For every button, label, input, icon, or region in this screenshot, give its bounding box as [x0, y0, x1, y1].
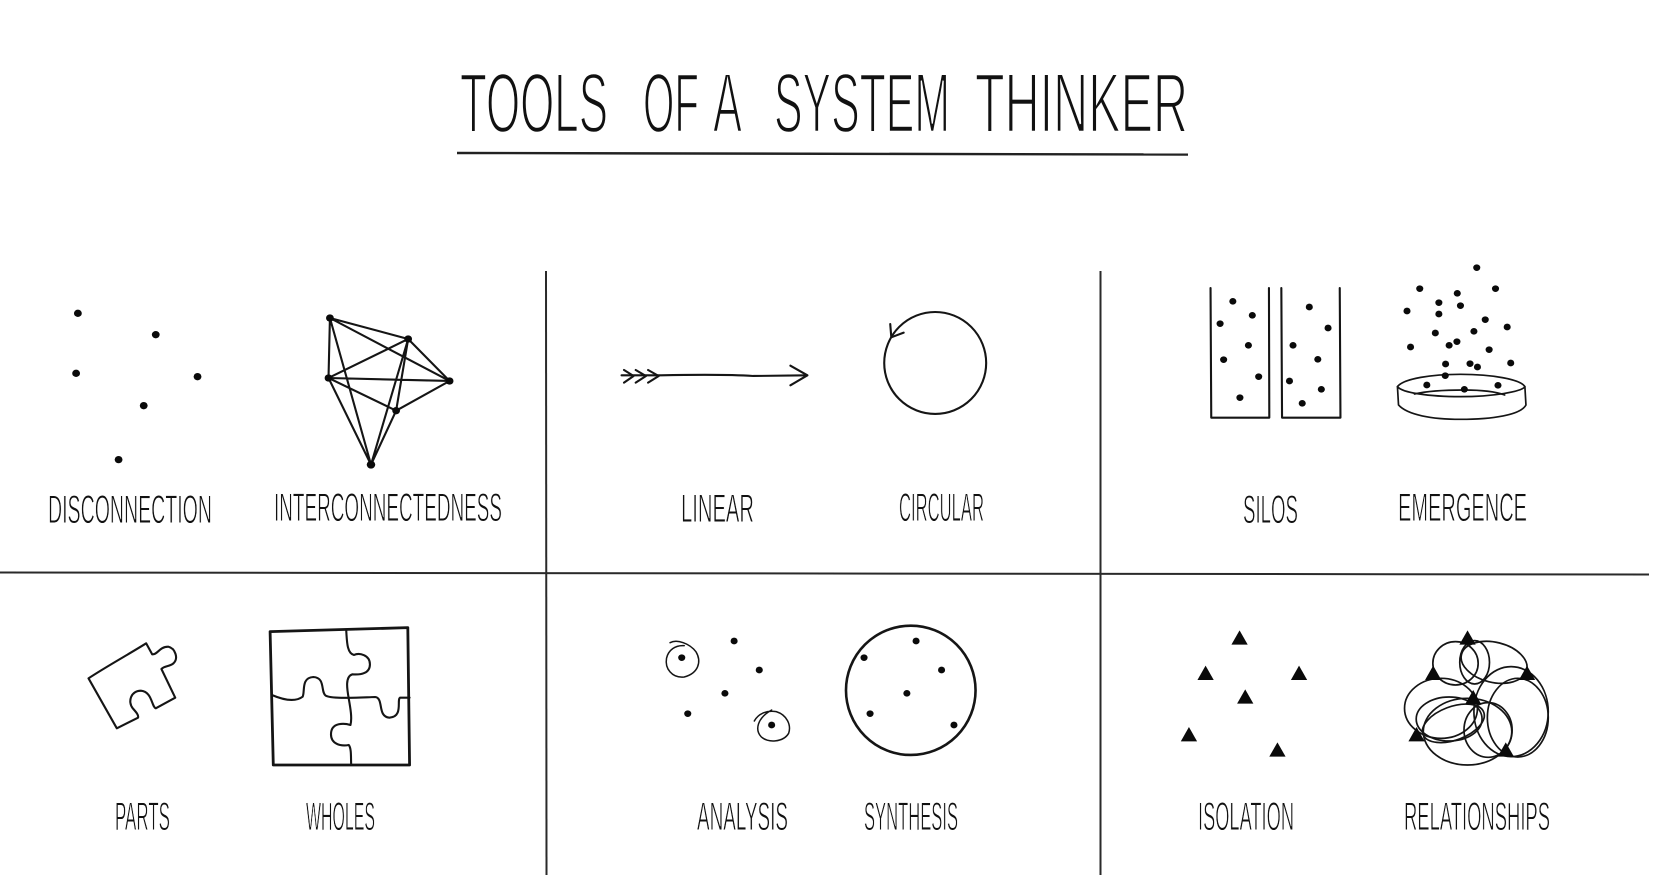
panel: silos vs emergence: SILOS: [1243, 488, 1298, 532]
title: THINKER: [975, 56, 1188, 150]
panel: isolation vs relationships: [1181, 630, 1550, 839]
icon: synthesis circle: [846, 626, 976, 755]
text: SYNTHESIS: [864, 795, 958, 839]
panel: analysis vs synthesis: ANALYSIS: [697, 795, 788, 839]
icon: isolated triangles: [1181, 630, 1307, 757]
title: TOOLS: [460, 56, 608, 150]
panel: linear vs circular: [622, 312, 986, 531]
text: CIRCULAR: [899, 486, 984, 530]
label: linear: LINEAR: [681, 487, 754, 531]
icon: related triangles with overlapping circles: [1405, 630, 1548, 765]
panel: parts vs wholes: PARTS: [115, 795, 170, 839]
icon: circular arrow: [884, 312, 986, 414]
panel: disconnection vs interconnectedness: DISCONNECTION: [48, 488, 212, 532]
icon: analysis dots with circled items: [666, 638, 789, 741]
label: emergence: EMERGENCE: [1398, 486, 1527, 530]
icon: interconnected network: [325, 314, 453, 469]
panel: parts vs wholes: WHOLES: [306, 795, 375, 839]
panel: isolation vs relationships: ISOLATION: [1198, 795, 1294, 839]
panel: disconnection vs interconnectedness: [48, 310, 502, 532]
panel: parts vs wholes: [89, 628, 410, 839]
icon: disconnected dots: [72, 310, 201, 463]
icon: linear arrow: [622, 366, 807, 385]
title: A: [713, 56, 742, 150]
icon: single puzzle piece: [89, 643, 176, 728]
title: OF: [643, 56, 699, 150]
panel: silos vs emergence: [1211, 264, 1527, 532]
panel: analysis vs synthesis: [666, 626, 976, 839]
text: INTERCONNECTEDNESS: [274, 486, 502, 530]
title underline: [457, 153, 1188, 154]
icon: emergence dish and dots: [1397, 264, 1526, 419]
icon: completed puzzle: [270, 628, 410, 765]
icon: silos: [1211, 288, 1340, 418]
title: SYSTEM: [774, 56, 950, 150]
title: [460, 56, 1188, 150]
grid lines: [0, 271, 1649, 875]
